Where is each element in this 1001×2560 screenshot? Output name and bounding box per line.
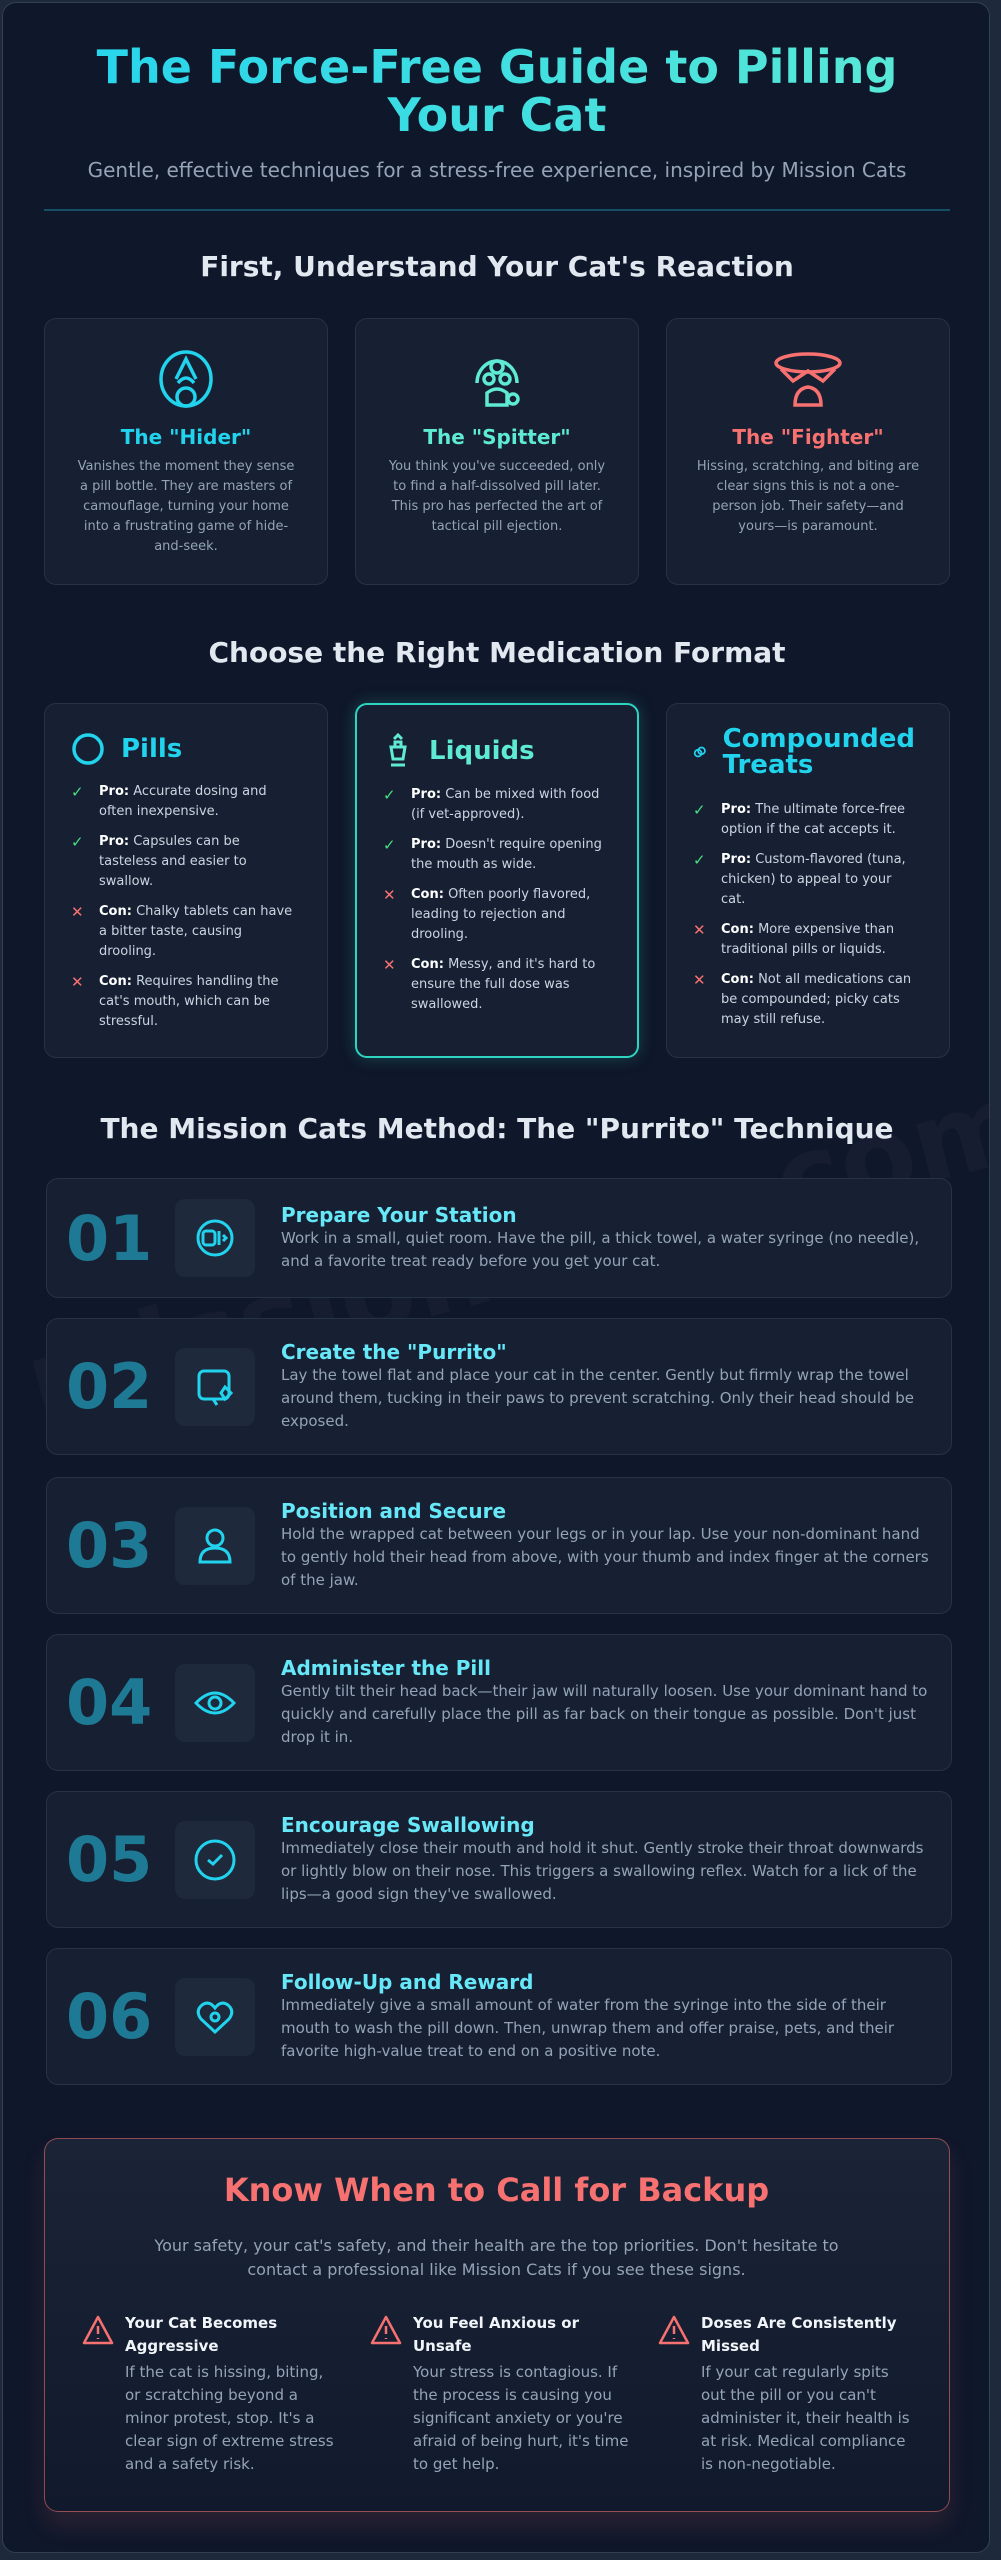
panel: treats: Pro: The ultimate force-free option if the cat accepts it. — [721, 802, 905, 837]
warning: anxious: You Feel Anxious or Unsafe — [413, 2314, 579, 2355]
step 02 — [46, 1318, 952, 1455]
panel: fighter — [666, 318, 950, 585]
step 03: 03 — [66, 1509, 152, 1582]
heading: treats: Treats — [723, 750, 813, 780]
panel: liquids: ✓ — [383, 786, 396, 804]
heading: pills: Pills — [121, 734, 182, 764]
icon: check — [175, 1820, 255, 1898]
step 05: Encourage Swallowing — [281, 1813, 535, 1837]
title: Your Cat — [388, 88, 606, 142]
step 06: Follow-Up and Reward — [281, 1970, 533, 1994]
heading: formats: Choose the Right Medication Format — [208, 636, 786, 669]
heading: spitter: The "Spitter" — [423, 425, 571, 449]
icon: spitter — [475, 359, 520, 407]
step 02: Lay the towel flat and place your cat in the center. Gently but firmly wrap the towel around them, tucking in their paws to prevent scratching. Only their head should be exposed. — [281, 1366, 914, 1430]
panel: treats: ✓ — [693, 851, 706, 869]
panel: liquids — [355, 703, 639, 1058]
panel: pills: Pro: Capsules can be tasteless and easier to swallow. — [99, 834, 247, 889]
text: hider: Vanishes the moment they sense a pill bottle. They are masters of camouflage, turning your home into a frustrating game of hide-and-seek. — [78, 459, 294, 554]
step 04 — [46, 1634, 952, 1771]
step 04: 04 — [66, 1666, 152, 1739]
text: fighter: Hissing, scratching, and biting are clear signs this is not a one-person job. Their safety—and yours—is paramount. — [697, 459, 919, 534]
panel: liquids: Con: Often poorly flavored, leading to rejection and drooling. — [411, 887, 590, 942]
panel: liquids: ✕ — [383, 956, 396, 974]
heading: reactions: First, Understand Your Cat's Reaction — [200, 250, 794, 283]
step 03 — [46, 1477, 952, 1614]
icon: fighter — [774, 352, 842, 407]
panel: treats: Con: More expensive than traditional pills or liquids. — [721, 922, 894, 957]
step 03: Hold the wrapped cat between your legs or in your lap. Use your non-dominant hand to gently hold their head from above, with your thumb and index finger at the corners of the jaw. — [281, 1525, 929, 1589]
step 05: 05 — [66, 1823, 152, 1896]
heading: method: The Mission Cats Method: The "Purrito" Technique — [100, 1112, 894, 1145]
step 01: Prepare Your Station — [281, 1203, 517, 1227]
heading: liquids — [389, 733, 535, 766]
step 01 — [46, 1178, 952, 1298]
panel: liquids: Pro: Doesn't require opening the mouth as wide. — [411, 837, 602, 872]
icon: hider — [159, 350, 213, 408]
heading: pills — [72, 733, 182, 765]
heading: treats — [694, 724, 915, 780]
warning: anxious: Your stress is contagious. If the process is causing you significant anxiety or you're afraid of being hurt, it's time to get help. — [413, 2363, 628, 2473]
panel: spitter — [355, 318, 639, 585]
panel: pills: ✕ — [71, 973, 84, 991]
step 01: 01 — [66, 1202, 152, 1274]
step 06: Immediately give a small amount of water from the syringe into the side of their mouth to wash the pill down. Then, unwrap them and offer praise, pets, and their favorite high-value treat to end on a positive note. — [281, 1996, 894, 2060]
heading: backup: Know When to Call for Backup — [224, 2171, 769, 2209]
step 06 — [46, 1948, 952, 2085]
heading: treats: Compounded — [723, 724, 915, 754]
panel: hider — [44, 318, 328, 585]
panel: pills: Con: Requires handling the cat's mouth, which can be stressful. — [99, 974, 278, 1029]
heading: fighter: The "Fighter" — [732, 425, 884, 449]
panel: pills — [44, 703, 328, 1058]
warning: missed: If your cat regularly spits out the pill or you can't administer it, their health is at risk. Medical compliance is non-negotiable. — [701, 2363, 910, 2473]
subtitle: Gentle, effective techniques for a stress-free experience, inspired by Mission Cats — [88, 158, 906, 182]
panel: liquids: Pro: Can be mixed with food (if vet-approved). — [411, 787, 599, 822]
text: backup intro: Your safety, your cat's safety, and their health are the top priorities. Don't hesitate to contact a professional like Mission Cats if you see these signs. — [154, 2236, 839, 2279]
panel: backup — [44, 2138, 950, 2512]
step 04: Administer the Pill — [281, 1656, 491, 1680]
title: The Force-Free Guide to Pilling — [97, 40, 897, 94]
warning: aggressive — [82, 2314, 334, 2473]
text: spitter: You think you've succeeded, only to find a half-dissolved pill later. This pro has perfected the art of tactical pill ejection. — [389, 459, 605, 534]
warning: aggressive: Your Cat Becomes Aggressive — [125, 2314, 277, 2355]
step 04: Gently tilt their head back—their jaw will naturally loosen. Use your dominant hand to quickly and carefully place the pill as far back on their tongue as possible. Don't just drop it in. — [281, 1682, 927, 1746]
icon: towel — [175, 1348, 255, 1426]
panel: pills: Con: Chalky tablets can have a bitter taste, causing drooling. — [99, 904, 292, 959]
step 03: Position and Secure — [281, 1499, 506, 1523]
step 06: 06 — [66, 1980, 152, 2053]
panel: treats: Pro: Custom-flavored (tuna, chicken) to appeal to your cat. — [721, 852, 906, 907]
step 02: Create the "Purrito" — [281, 1340, 507, 1364]
warning: missed: Doses Are Consistently Missed — [701, 2314, 897, 2355]
icon: heart — [175, 1978, 255, 2056]
panel: liquids: Con: Messy, and it's hard to ensure the full dose was swallowed. — [411, 957, 595, 1012]
panel: treats: ✕ — [693, 921, 706, 939]
icon: eye — [175, 1664, 255, 1742]
title — [3, 43, 991, 139]
icon: station — [175, 1199, 255, 1277]
warning: anxious — [370, 2314, 628, 2473]
warning: missed — [658, 2314, 910, 2473]
heading: hider: The "Hider" — [121, 425, 251, 449]
step 01: Work in a small, quiet room. Have the pill, a thick towel, a water syringe (no needle), and a favorite treat ready before you get your cat. — [281, 1229, 919, 1270]
panel: pills: Pro: Accurate dosing and often inexpensive. — [99, 784, 267, 819]
panel: pills: ✕ — [71, 903, 84, 921]
panel: treats: ✕ — [693, 971, 706, 989]
warning: aggressive: If the cat is hissing, biting, or scratching beyond a minor protest, stop. It's a clear sign of extreme stress and a safety risk. — [125, 2363, 334, 2473]
panel: treats — [666, 703, 950, 1058]
heading: liquids: Liquids — [429, 736, 535, 766]
panel: pills: ✓ — [71, 783, 84, 801]
panel: pills: ✓ — [71, 833, 84, 851]
panel: liquids: ✕ — [383, 886, 396, 904]
step 05 — [46, 1791, 952, 1928]
step 02: 02 — [66, 1350, 152, 1423]
panel: treats: ✓ — [693, 801, 706, 819]
panel: liquids: ✓ — [383, 836, 396, 854]
step 05: Immediately close their mouth and hold it shut. Gently stroke their throat downwards or lightly blow on their nose. This triggers a swallowing reflex. Watch for a lick of the lips—a good sign they've swallowed. — [281, 1839, 924, 1903]
icon: person — [175, 1506, 255, 1584]
panel: treats: Con: Not all medications can be compounded; picky cats may still refuse. — [721, 972, 911, 1027]
